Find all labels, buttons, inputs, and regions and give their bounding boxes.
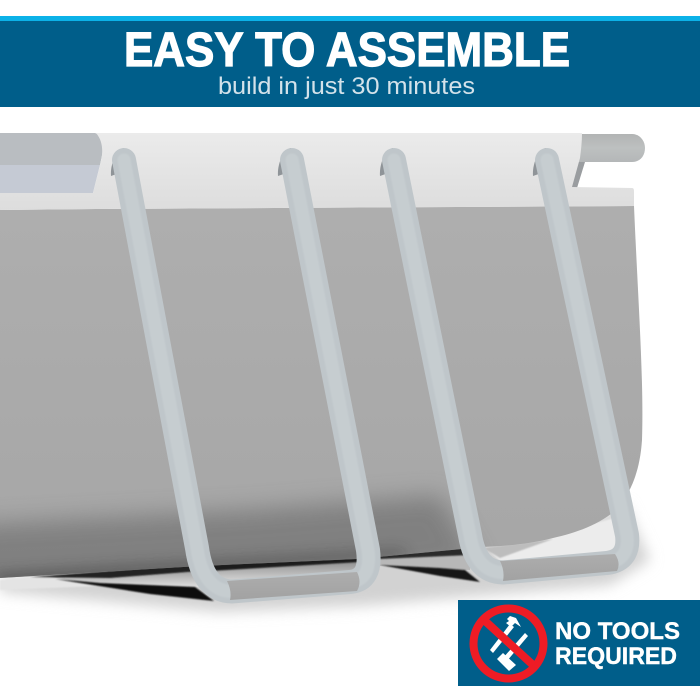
pool illustration xyxy=(0,133,645,610)
wall shading xyxy=(0,488,461,578)
left inner ledge xyxy=(0,165,100,193)
left top rail xyxy=(0,133,103,165)
ladder frame one xyxy=(124,160,369,592)
badge text xyxy=(555,618,680,670)
icon: hammer xyxy=(490,616,521,653)
step two xyxy=(500,554,619,581)
subtitle: build in just 30 minutes xyxy=(218,73,475,100)
badge text: REQUIRED xyxy=(555,643,677,670)
rail strut xyxy=(571,162,585,188)
ground shadow xyxy=(0,505,650,612)
badge text: NO TOOLS xyxy=(555,618,680,645)
header banner xyxy=(0,16,700,107)
white belt xyxy=(0,133,634,210)
badge: no tools required xyxy=(458,600,700,686)
ladder slots xyxy=(111,148,550,176)
icon: crossed-out tools xyxy=(474,608,544,678)
icon: prohibition sign xyxy=(474,608,544,678)
pool wall xyxy=(0,206,642,578)
under-pool shadows xyxy=(30,539,553,601)
right top rail xyxy=(577,134,645,162)
icon: mallet xyxy=(497,633,528,671)
title: EASY TO ASSEMBLE xyxy=(124,24,570,77)
ladder frame two xyxy=(394,160,627,572)
step one xyxy=(227,572,360,600)
